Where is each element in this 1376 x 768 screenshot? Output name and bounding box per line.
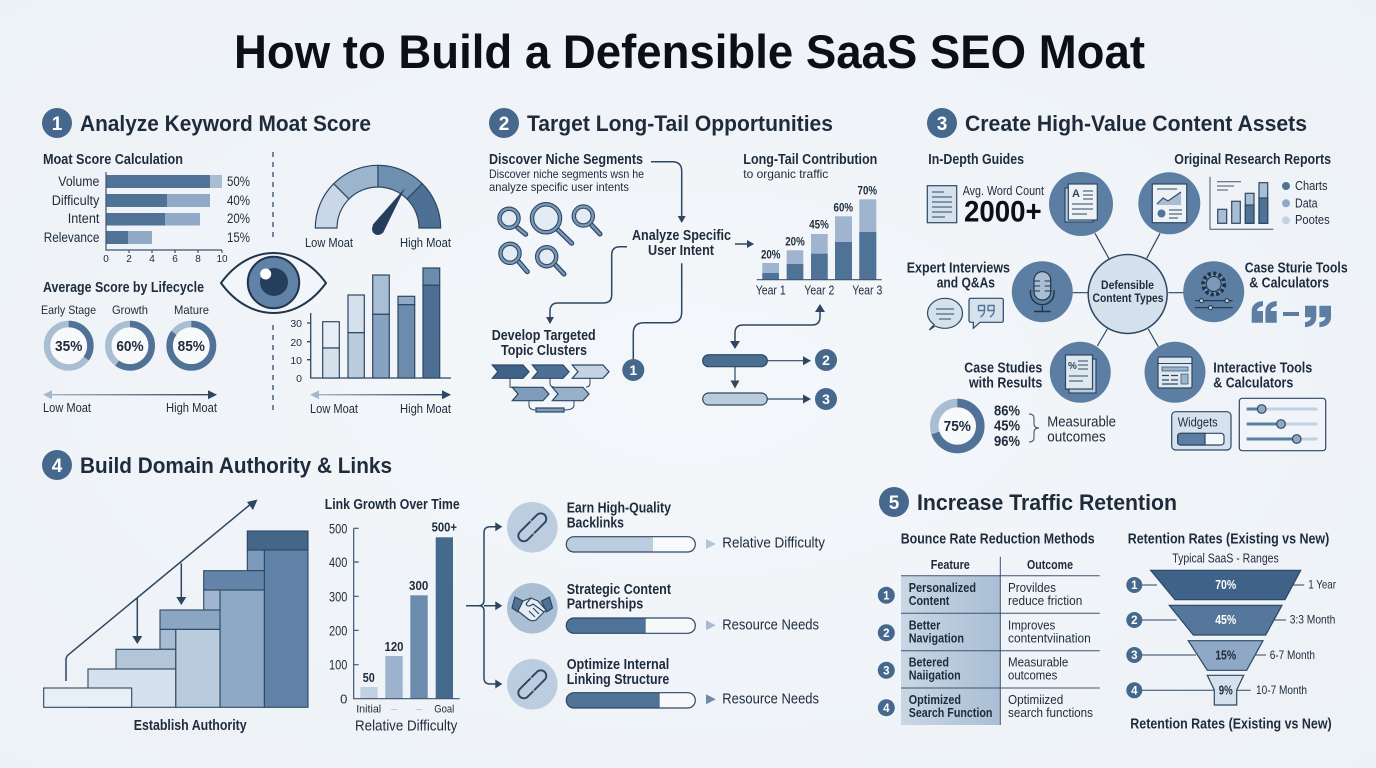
table: bounce rate reduction methods: Personalized	[909, 580, 976, 595]
in-depth guides: In-Depth Guides	[928, 152, 1024, 168]
text: analyze specific user intent: Analyze Specific	[632, 228, 731, 244]
donut: measurable outcomes 75%: 86%	[994, 403, 1020, 419]
diagram: topic cluster chevrons	[492, 365, 609, 412]
bar chart: link growth over time: –	[391, 703, 398, 715]
original research reports	[1138, 152, 1331, 234]
table: bounce rate reduction methods: 1	[883, 590, 890, 602]
expert interviews: and Q&As	[937, 275, 995, 291]
bar chart: stacked moat bars: 0	[296, 373, 302, 385]
heading: section 1: 1	[52, 114, 63, 135]
table: bounce rate reduction methods: Optimiized	[1008, 692, 1063, 707]
arrow: analyze to contribution chart	[735, 243, 753, 245]
sliders panel	[1239, 398, 1326, 451]
donut charts: average score by lifecycle: 85%	[178, 339, 205, 355]
arrow: low to high moat, lifecycle: Low Moat	[43, 401, 91, 415]
table: bounce rate reduction methods: 4	[883, 703, 890, 715]
hub: defensible content types	[1088, 254, 1167, 334]
case studie tools	[1183, 260, 1348, 322]
bar chart: moat score calculation: 6	[172, 254, 178, 265]
bar chart: link growth over time	[325, 497, 460, 735]
table: bounce rate reduction methods: Betered	[909, 655, 949, 670]
bar chart: moat score calculation	[43, 152, 250, 265]
bar chart: link growth over time: 0	[340, 692, 347, 707]
bar chart: moat score calculation: 50%	[227, 174, 250, 189]
table: bounce rate reduction methods: outcomes	[1008, 668, 1058, 683]
panel: 1 analyze keyword moat score	[41, 108, 451, 416]
bar chart: link growth over time: 400	[329, 555, 347, 570]
icon: eye	[221, 253, 326, 313]
bar chart: moat score calculation: Difficulty	[52, 193, 100, 208]
bar chart: link growth over time: 300	[329, 589, 347, 604]
bar chart: link growth over time: 500	[329, 521, 347, 536]
hub: defensible content types: Defensible	[1101, 280, 1154, 292]
funnel chart: retention rates: 9%	[1219, 683, 1233, 697]
donut: measurable outcomes 75%	[934, 403, 1116, 450]
gauge: moat level: High Moat	[400, 236, 451, 250]
funnel chart: retention rates: Typical SaaS - Ranges	[1172, 552, 1279, 566]
interactive tools and calculators: Interactive Tools	[1213, 361, 1312, 377]
table: bounce rate reduction methods: Improves	[1008, 617, 1056, 632]
case studies with results: Case Studies	[964, 361, 1042, 377]
arrow: low to high moat, lifecycle	[43, 390, 217, 415]
text: analyze specific user intent	[632, 228, 731, 259]
funnel chart: retention rates: Retention Rates (Existing vs New)	[1128, 531, 1329, 547]
donut charts: average score by lifecycle: Early Stage	[41, 303, 96, 317]
bar chart: long-tail contribution: Year 1	[756, 283, 786, 297]
table: bounce rate reduction methods: Feature	[931, 558, 970, 572]
flow: pills and numbered steps: 2	[822, 352, 830, 368]
text: develop targeted topic clusters: Develop Targeted	[492, 328, 596, 344]
table: bounce rate reduction methods: Better	[909, 617, 940, 632]
bar chart: long-tail contribution: to organic traffic	[743, 167, 828, 181]
item: earn high-quality backlinks: Relative Difficulty	[722, 536, 826, 552]
donut: measurable outcomes 75%: Measurable	[1047, 415, 1116, 431]
case studies with results: with Results	[968, 375, 1042, 391]
heading: section 5: 5	[889, 493, 900, 514]
funnel chart: retention rates: Retention Rates (Existing vs New)	[1130, 716, 1332, 732]
arrow: rising authority	[66, 500, 258, 681]
panel: 2 target long-tail opportunities	[489, 108, 882, 412]
arrow: analyze to step 1	[633, 263, 682, 359]
table: bounce rate reduction methods: Search Function	[909, 705, 992, 720]
item: strategic content partnerships	[507, 582, 819, 634]
bar chart: moat score calculation: 15%	[227, 230, 250, 245]
funnel chart: retention rates: 10-7 Month	[1256, 683, 1307, 697]
bar chart: moat score calculation: 4	[149, 254, 155, 265]
in-depth guides: Avg. Word Count	[963, 184, 1044, 198]
in-depth guides	[927, 152, 1113, 236]
item: strategic content partnerships: Partnerships	[567, 596, 643, 612]
funnel chart: retention rates: 15%	[1215, 648, 1236, 662]
table: bounce rate reduction methods: Bounce Rate Reduction Methods	[901, 531, 1095, 547]
bar chart: long-tail contribution: 60%	[834, 200, 853, 214]
heading: section 2: Target Long-Tail Opportunities	[527, 111, 833, 136]
bar chart: long-tail contribution: Year 2	[804, 283, 834, 297]
item: optimize internal linking structure: Optimize Internal	[567, 657, 669, 673]
heading: section 3: Create High-Value Content Assets	[965, 111, 1307, 136]
table: bounce rate reduction methods: Navigation	[909, 630, 964, 645]
funnel chart: retention rates	[1126, 531, 1336, 732]
table: bounce rate reduction methods: 2	[883, 628, 890, 640]
hub: defensible content types: Content Types	[1092, 293, 1164, 305]
bar chart: long-tail contribution: 20%	[761, 247, 781, 261]
expert interviews: Expert Interviews	[907, 260, 1010, 276]
table: bounce rate reduction methods: search functions	[1008, 705, 1093, 720]
donut charts: average score by lifecycle	[41, 280, 213, 367]
table: bounce rate reduction methods	[878, 531, 1100, 725]
expert interviews	[907, 260, 1073, 330]
original research reports: Original Research Reports	[1174, 152, 1331, 168]
panel: 3 create high-value content assets	[907, 108, 1348, 451]
bar chart: moat score calculation: 40%	[227, 193, 250, 208]
arrows: branching bracket	[466, 522, 502, 688]
funnel chart: retention rates: 45%	[1215, 613, 1236, 627]
bar chart: moat score calculation: 2	[126, 254, 132, 265]
funnel chart: retention rates: 2	[1131, 615, 1138, 627]
heading: section 5: Increase Traffic Retention	[917, 490, 1177, 515]
donut: measurable outcomes 75%: outcomes	[1047, 430, 1106, 446]
heading: section 4: Build Domain Authority & Links	[80, 453, 392, 478]
item: strategic content partnerships: Strategic Content	[567, 582, 671, 598]
donut: measurable outcomes 75%: 45%	[994, 419, 1020, 435]
icon: large quotation marks	[1252, 301, 1331, 327]
bar chart: link growth over time: 200	[329, 623, 347, 638]
arrow: low to high moat, chart: Low Moat	[310, 402, 358, 416]
panel: 5 increase traffic retention	[878, 487, 1336, 732]
donut charts: average score by lifecycle: Mature	[174, 303, 209, 317]
bar chart: stacked moat bars: 30	[290, 318, 302, 330]
heading: section 3: 3	[937, 114, 947, 135]
item: earn high-quality backlinks	[507, 500, 826, 553]
bar chart: moat score calculation: 0	[103, 254, 109, 265]
arrows: drop to steps	[132, 563, 186, 644]
bar chart: link growth over time: Initial	[356, 703, 381, 715]
bar chart: moat score calculation: 10	[216, 254, 228, 265]
item: strategic content partnerships: Resource Needs	[722, 618, 819, 634]
heading: section 1	[42, 108, 371, 138]
donut charts: average score by lifecycle: 60%	[116, 339, 144, 355]
bar chart: moat score calculation: 20%	[227, 211, 250, 226]
donut: measurable outcomes 75%: 75%	[944, 419, 971, 435]
donut charts: average score by lifecycle: Average Score by Lifecycle	[43, 280, 204, 296]
bar chart: stacked moat bars	[290, 268, 451, 385]
donut charts: average score by lifecycle: 35%	[55, 339, 82, 355]
funnel chart: retention rates: 4	[1131, 686, 1138, 698]
original research reports: Data	[1295, 196, 1318, 210]
text: discover niche segments: Discover niche segments wsn he	[489, 167, 644, 181]
flow: pills and numbered steps: 3	[822, 391, 830, 407]
widgets: Widgets	[1178, 415, 1218, 430]
title: How to Build a Defensible SaaS SEO Moat	[234, 25, 1145, 78]
text: analyze specific user intent: User Intent	[648, 243, 714, 259]
text: develop targeted topic clusters: Topic Clusters	[501, 343, 587, 359]
table: bounce rate reduction methods: Naiigation	[909, 668, 961, 683]
item: optimize internal linking structure: Linking Structure	[567, 672, 669, 688]
bar chart: stacked moat bars: 10	[290, 355, 302, 367]
funnel chart: retention rates: 1	[1131, 580, 1138, 592]
table: bounce rate reduction methods: reduce friction	[1008, 593, 1082, 608]
item: earn high-quality backlinks: Earn High-Quality	[567, 500, 671, 516]
item: optimize internal linking structure	[507, 657, 819, 710]
funnel chart: retention rates: 1 Year	[1308, 577, 1336, 591]
original research reports: Charts	[1295, 179, 1328, 193]
case studie tools: & Calculators	[1249, 275, 1329, 291]
arrow: discover to analyze	[651, 162, 682, 222]
funnel chart: retention rates: 3:3 Month	[1290, 612, 1335, 626]
flow: pills and numbered steps	[703, 349, 837, 410]
bar chart: link growth over time: 120	[384, 640, 404, 654]
interactive tools and calculators: & Calculators	[1213, 375, 1293, 391]
table: bounce rate reduction methods: Outcome	[1027, 558, 1073, 572]
badge: 1: 1	[629, 362, 637, 378]
bar chart: long-tail contribution: 20%	[785, 234, 805, 248]
bar chart: long-tail contribution: 70%	[858, 183, 877, 197]
arrow: analyze to clusters	[550, 247, 627, 323]
heading: section 1: Analyze Keyword Moat Score	[80, 111, 371, 136]
table: bounce rate reduction methods: Provildes	[1008, 580, 1056, 595]
in-depth guides: A	[1072, 188, 1080, 200]
bar chart: link growth over time: 50	[363, 671, 375, 685]
original research reports: Pootes	[1295, 213, 1330, 227]
bar chart: moat score calculation: Relevance	[44, 230, 99, 245]
item: earn high-quality backlinks: Backlinks	[567, 515, 624, 531]
bar chart: long-tail contribution: Year 3	[852, 283, 882, 297]
donut charts: average score by lifecycle: Growth	[112, 303, 148, 317]
widgets	[1172, 412, 1231, 450]
funnel chart: retention rates: 70%	[1215, 578, 1236, 592]
interactive tools and calculators	[1144, 342, 1312, 403]
bar chart: long-tail contribution: 45%	[809, 218, 829, 232]
table: bounce rate reduction methods: Measurable	[1008, 655, 1068, 670]
bar chart: moat score calculation: Volume	[58, 174, 99, 189]
heading: section 2: 2	[499, 114, 509, 135]
item: optimize internal linking structure: Resource Needs	[722, 692, 819, 708]
table: bounce rate reduction methods: Optimized	[909, 692, 961, 707]
gauge: moat level: Low Moat	[305, 236, 353, 250]
bar chart: stacked moat bars: 20	[290, 337, 302, 349]
case studies with results: %	[1068, 361, 1077, 372]
arrow: low to high moat, chart: High Moat	[400, 402, 451, 416]
icon: magnifying glasses	[500, 204, 600, 274]
donut: measurable outcomes 75%: 96%	[994, 434, 1020, 450]
case studies with results	[964, 342, 1111, 403]
case studie tools: Case Sturie Tools	[1245, 260, 1348, 276]
bar chart: moat score calculation: 8	[195, 254, 201, 265]
table: bounce rate reduction methods: Content	[909, 593, 950, 608]
panel: 4 build domain authority and links	[42, 450, 826, 735]
badge: 1	[622, 359, 644, 381]
bar chart: moat score calculation: Moat Score Calculation	[43, 152, 183, 168]
gauge: moat level	[305, 165, 451, 250]
bar chart: link growth over time: 300	[409, 579, 428, 593]
text: establish authority: Establish Authority	[134, 718, 247, 734]
arrow: low to high moat, chart	[310, 390, 451, 416]
bar chart: link growth over time: Relative Difficulty	[355, 719, 458, 735]
bar chart: link growth over time: Goal	[434, 703, 454, 715]
table: bounce rate reduction methods: 3	[883, 666, 890, 678]
funnel chart: retention rates: 6-7 Month	[1270, 648, 1315, 662]
arrow: low to high moat, lifecycle: High Moat	[166, 401, 217, 415]
bar chart: long-tail contribution: Long-Tail Contribution	[743, 152, 877, 168]
text: discover niche segments	[489, 152, 644, 194]
bar chart: moat score calculation: Intent	[68, 211, 100, 226]
diagram: authority staircase	[44, 531, 308, 707]
heading: section 4: 4	[52, 456, 63, 477]
funnel chart: retention rates: 3	[1131, 650, 1138, 662]
text: discover niche segments: analyze specific user intents	[489, 180, 629, 194]
heading: section 4	[42, 450, 392, 480]
bar chart: long-tail contribution	[743, 152, 882, 297]
arrow: two-way chart link	[730, 304, 825, 349]
bar chart: link growth over time: Link Growth Over Time	[325, 497, 460, 513]
table: bounce rate reduction methods: contentviination	[1008, 630, 1091, 645]
bar chart: link growth over time: 500+	[432, 521, 457, 535]
in-depth guides: 2000+	[964, 196, 1042, 229]
bar chart: link growth over time: 100	[329, 658, 347, 673]
bar chart: link growth over time: –	[416, 703, 423, 715]
heading: section 5	[879, 487, 1177, 517]
text: develop targeted topic clusters	[492, 328, 596, 359]
text: discover niche segments: Discover Niche Segments	[489, 152, 643, 168]
